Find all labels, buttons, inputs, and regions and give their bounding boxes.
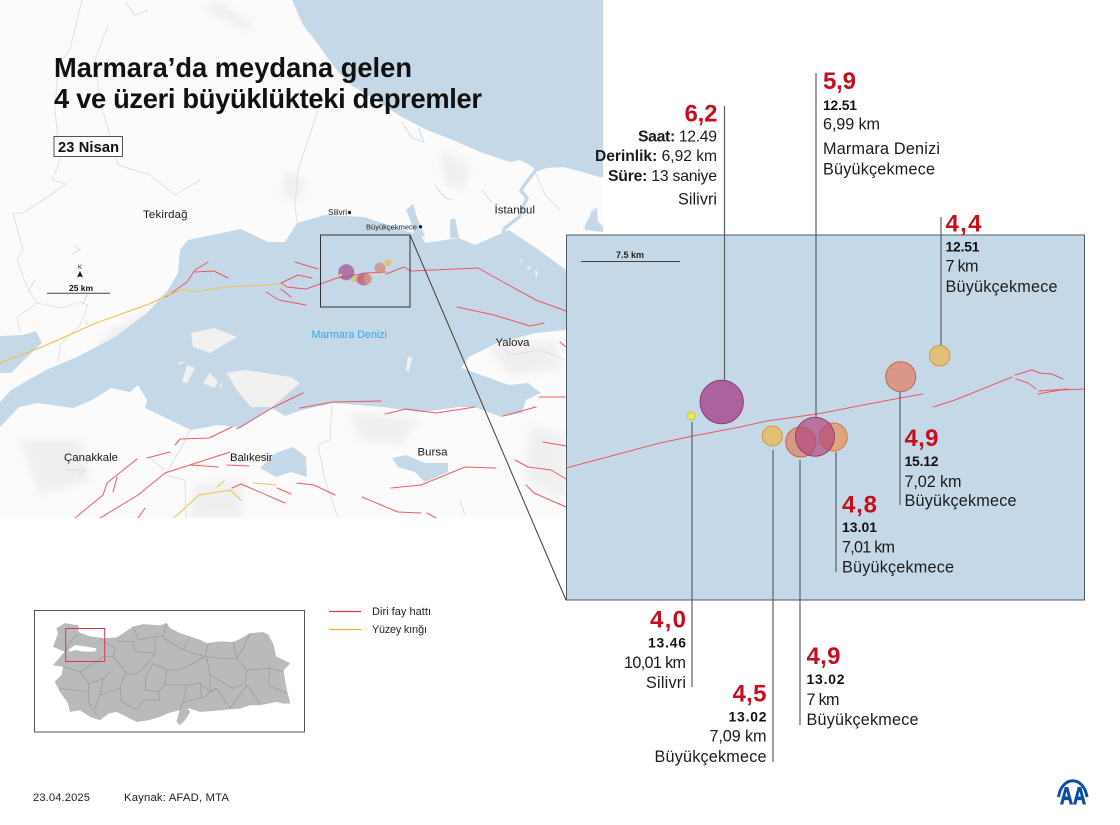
circle 4,4 <box>929 345 950 366</box>
label 5,9 <box>823 68 940 178</box>
circle 4,8 <box>819 423 847 451</box>
icon: AA logo <box>1058 781 1087 810</box>
map labels: Marmara Denizi <box>312 329 387 341</box>
label 4,0: 10,01 km <box>624 654 686 672</box>
surface ruptures <box>0 284 281 518</box>
label 5,9: Marmara Denizi <box>823 140 940 158</box>
label 4,9 north: 7,02 km <box>904 473 962 491</box>
inset scale <box>581 250 680 262</box>
circle 4,9 north <box>886 362 916 392</box>
label 4,5 <box>654 680 767 766</box>
map labels: Balıkesir <box>230 452 273 464</box>
Turkey silhouette <box>53 623 290 725</box>
leader lines <box>692 73 941 762</box>
islands <box>178 259 538 407</box>
sea: Bosphorus <box>503 171 535 233</box>
label 6,2: Saat: 12.49 <box>638 128 717 146</box>
legend: Diri fay hattı <box>372 606 431 618</box>
footer: Kaynak: AFAD, MTA <box>124 792 229 804</box>
label 4,4: 4,4 <box>946 210 982 238</box>
label 6,2: Silivri <box>678 190 717 208</box>
map labels: Çanakkale <box>64 452 118 464</box>
map labels: Silivri <box>328 208 347 217</box>
label 5,9: 5,9 <box>823 68 856 95</box>
label 6,2: Süre: 13 saniye <box>608 168 717 185</box>
label 4,5: 7,09 km <box>710 728 766 746</box>
map labels <box>64 204 535 464</box>
circle 6,2 <box>700 380 743 424</box>
inset scale: 7.5 km <box>616 250 644 260</box>
label 4,9 south <box>806 643 918 729</box>
label 4,0: 4,0 <box>650 606 686 634</box>
label 4,8: 13.01 <box>842 519 877 535</box>
label 4,4: Büyükçekmece <box>946 278 1058 296</box>
legend <box>329 606 431 636</box>
label 5,9: Büyükçekmece <box>823 160 935 178</box>
water: lakes <box>0 204 603 482</box>
sea: Marmara <box>0 215 610 430</box>
label 4,4: 7 km <box>946 258 978 276</box>
footer: 23.04.2025 <box>33 792 90 804</box>
base map <box>0 0 610 519</box>
north arrow and scale: K <box>78 265 82 271</box>
label 4,5: 13.02 <box>728 708 767 724</box>
circle 4,0 <box>687 412 695 420</box>
label 5,9: 12.51 <box>823 97 857 113</box>
label 4,9 north: Büyükçekmece <box>904 492 1016 510</box>
label 4,0: 13.46 <box>648 634 686 650</box>
inset panel <box>566 73 1085 762</box>
label 4,8: Büyükçekmece <box>842 558 954 576</box>
circle 4,5 <box>762 426 782 446</box>
label 4,9 south: Büyükçekmece <box>806 711 918 729</box>
map labels: Tekirdağ <box>143 209 188 221</box>
sea: Black Sea <box>292 0 603 178</box>
label 5,9: 6,99 km <box>823 116 880 134</box>
map labels: İstanbul <box>494 204 535 216</box>
label 4,4 <box>946 210 1058 296</box>
map labels: Bursa <box>418 446 448 458</box>
footer <box>33 792 229 804</box>
label 4,8 <box>842 492 954 576</box>
label 6,2: Derinlik: 6,92 km <box>595 148 717 165</box>
label 4,9 north <box>904 425 1016 510</box>
locator rectangle <box>66 628 105 662</box>
title: Marmara’da meydana gelen <box>54 52 412 83</box>
label 4,0 <box>624 606 686 692</box>
map labels: Yalova <box>496 337 530 349</box>
small epicentre circles <box>338 260 392 286</box>
date tag: 23 Nisan <box>58 140 119 156</box>
map labels: Büyükçekmece <box>366 222 417 232</box>
circle 4,9 south <box>786 427 816 457</box>
inset faults <box>566 370 1085 468</box>
label 6,2 <box>595 100 718 208</box>
province borders <box>13 0 603 518</box>
faults: active fault lines on the map <box>75 262 566 519</box>
locator map panel <box>34 610 304 732</box>
locator box and connector line <box>320 235 566 600</box>
label 4,5: 4,5 <box>732 680 766 708</box>
label 4,8: 7,01 km <box>842 538 895 556</box>
label 4,9 north: 4,9 <box>904 425 938 452</box>
label 4,9 south: 4,9 <box>806 643 840 670</box>
icon: AA logo: AA <box>1060 783 1086 810</box>
label 4,9 south: 13.02 <box>806 671 845 687</box>
label 4,0: Silivri <box>646 674 686 692</box>
label 4,8: 4,8 <box>842 492 877 518</box>
label 4,5: Büyükçekmece <box>654 748 766 766</box>
title: 4 ve üzeri büyüklükteki depremler <box>54 83 482 114</box>
title <box>54 52 482 114</box>
label 4,4: 12.51 <box>946 238 980 254</box>
label 4,9 south: 7 km <box>806 691 840 709</box>
circle 5,9 <box>796 417 834 456</box>
earthquake circles <box>687 345 950 457</box>
legend: Yüzey kırığı <box>372 624 427 636</box>
north arrow and scale: 25 km <box>69 283 93 293</box>
label 6,2: 6,2 <box>684 100 718 128</box>
north arrow and scale <box>47 265 110 293</box>
label 4,9 north: 15.12 <box>904 453 939 469</box>
